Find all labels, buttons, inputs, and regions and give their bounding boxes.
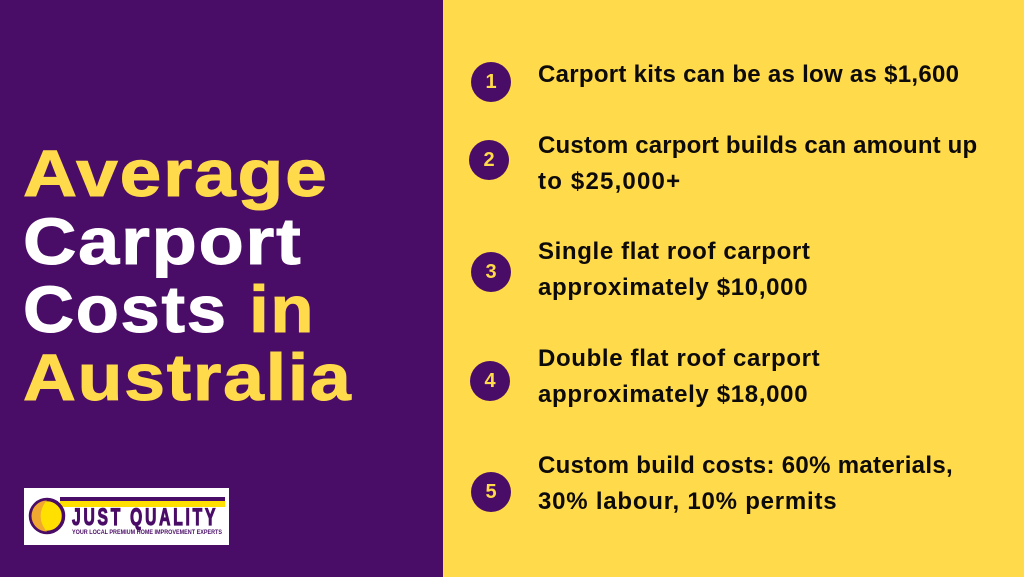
item 1: Carport kits can be as low as $1,600 (538, 61, 959, 88)
item 4: 4 (484, 370, 496, 392)
logo: Just Quality (24, 488, 229, 545)
title: Average (23, 136, 329, 210)
item 3 (471, 238, 810, 301)
item 4: Double flat roof carport (538, 345, 820, 372)
item 5 (471, 452, 953, 515)
item 5: Custom build costs: 60% materials, (538, 452, 953, 479)
item 1: 1 (485, 71, 497, 93)
item 2: 2 (483, 149, 495, 171)
item 4 (470, 345, 820, 408)
item 3: 3 (485, 261, 497, 283)
item 2 (469, 132, 977, 195)
item 5: 30% labour, 10% permits (538, 488, 837, 515)
title: Costs in (23, 272, 315, 346)
title: Carport (23, 204, 303, 278)
item 4: approximately $18,000 (538, 381, 808, 408)
title: Australia (23, 340, 352, 414)
panel: title background (0, 0, 443, 577)
item 3: Single flat roof carport (538, 238, 810, 265)
item 1 (471, 61, 959, 102)
logo: Just Quality: JUST QUALITY (72, 505, 218, 531)
item 2: Custom carport builds can amount up (538, 132, 977, 159)
title (23, 136, 352, 414)
item 5: 5 (485, 481, 497, 503)
item 2: to $25,000+ (538, 168, 681, 195)
item 3: approximately $10,000 (538, 274, 808, 301)
